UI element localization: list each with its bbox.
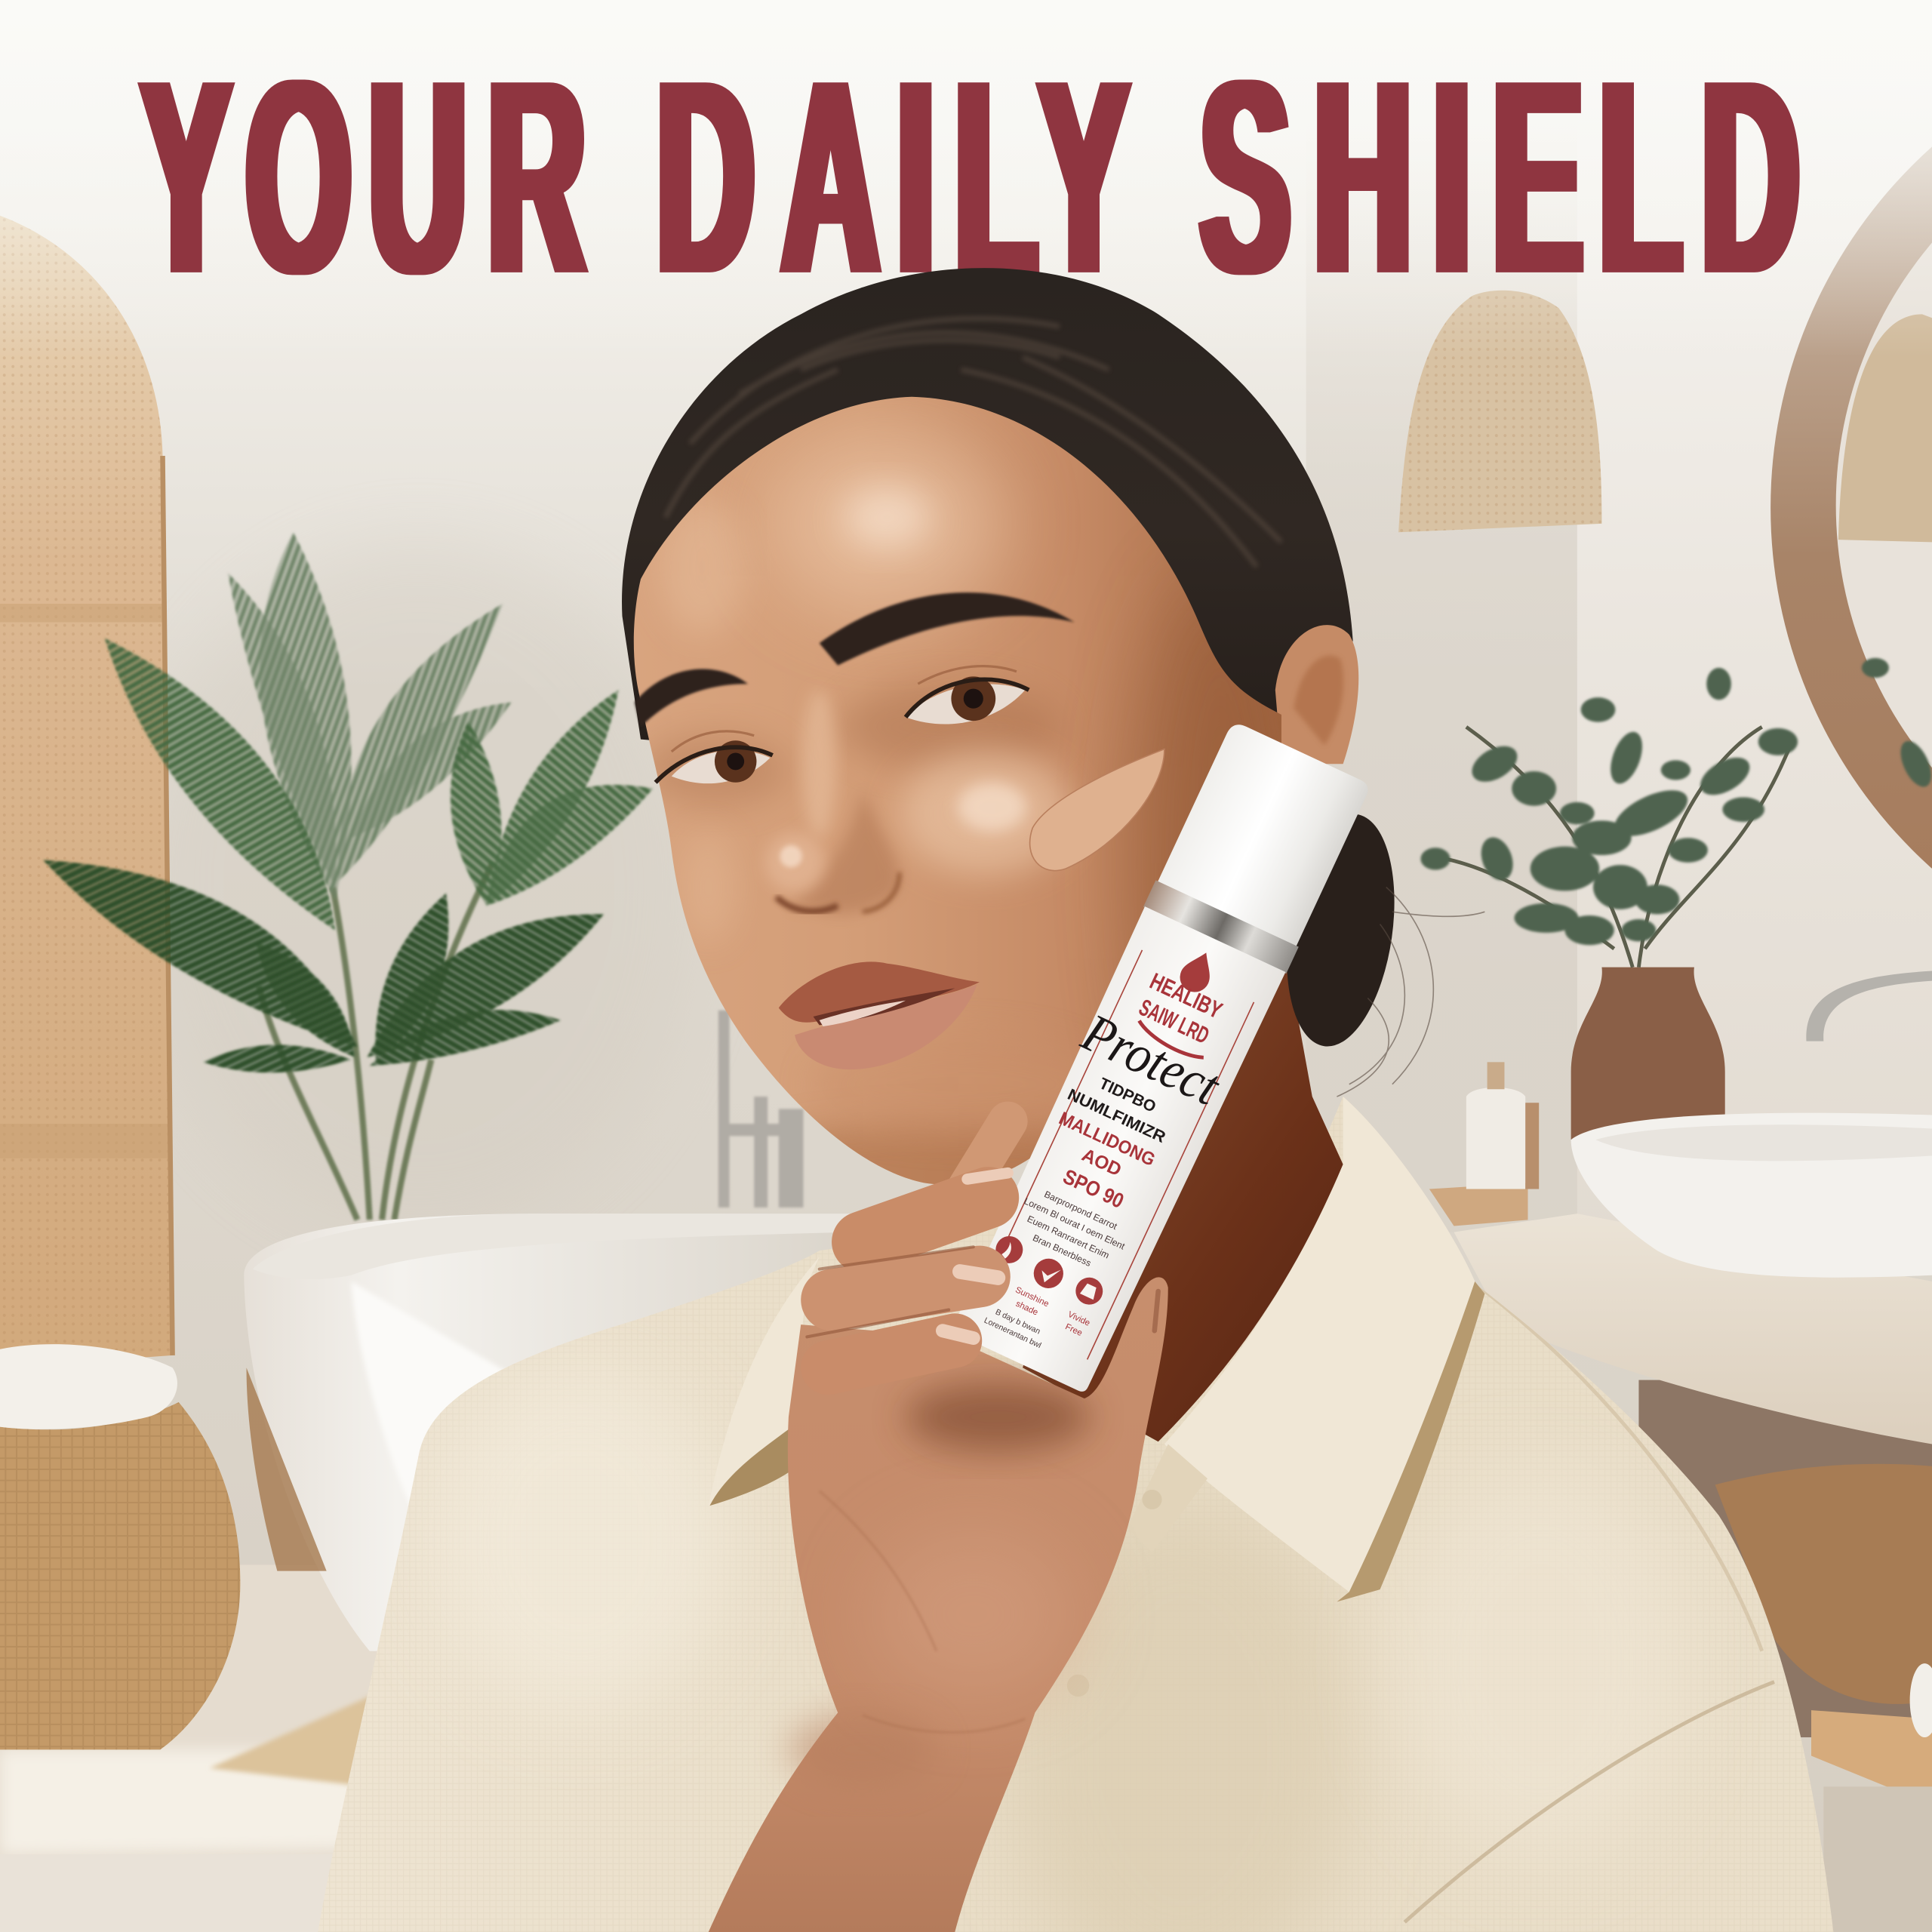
product description <box>1032 1065 1178 1217</box>
palm shadow <box>906 1383 1091 1451</box>
fine print below icons: Sunshine <box>1014 1285 1051 1309</box>
brand name: HEALIBY <box>1146 968 1226 1024</box>
shirt <box>318 1097 1833 1932</box>
fine print below icons: Vivide <box>1066 1310 1091 1328</box>
freestanding bathtub <box>244 1214 863 1651</box>
product description: TIDPBO <box>1097 1075 1158 1116</box>
eye left <box>656 731 773 783</box>
nails <box>968 1173 1008 1179</box>
label border lines <box>976 950 1254 1359</box>
top white haze <box>0 0 1932 357</box>
palm creases <box>820 1491 1025 1733</box>
round mirror <box>1770 23 1932 992</box>
skin shading <box>1114 587 1281 964</box>
sink and tap <box>1571 971 1932 1278</box>
floor <box>0 1564 518 1932</box>
fine print below icons: Free <box>1064 1322 1084 1338</box>
woman <box>318 268 1833 1932</box>
product description: MALLIDONG <box>1056 1109 1158 1171</box>
index finger tip <box>951 1121 1008 1214</box>
bottle cap <box>1158 721 1371 947</box>
product bottle <box>946 719 1374 1396</box>
fronds near <box>43 860 604 1072</box>
leaves <box>1420 658 1932 945</box>
brand drop logo <box>1175 946 1220 997</box>
eucalyptus plant <box>1420 658 1932 1140</box>
mirror lamp reflection <box>1838 314 1932 542</box>
swoosh <box>1134 1020 1206 1062</box>
title: YOUR DAILY SHIELD <box>141 23 1799 332</box>
benefit icons <box>989 1232 1109 1312</box>
fine print: Euem Ranrarert Enim <box>1026 1214 1111 1261</box>
rattan room divider <box>0 216 173 1367</box>
brand name: SAIW LRD <box>1135 994 1214 1049</box>
lips <box>779 961 980 1069</box>
forearm and palm <box>709 1277 1168 1932</box>
face <box>632 397 1281 1184</box>
nose <box>765 789 900 913</box>
product bottle: Lorenerantan bwl <box>983 1316 1042 1350</box>
fine print below icons <box>1008 1285 1091 1340</box>
vase <box>1571 968 1725 1140</box>
pendant lamp <box>1398 291 1601 532</box>
cream swatch on cheek <box>1030 749 1164 871</box>
collar seam shadow <box>1337 1281 1484 1601</box>
product bottle: B day b bwan <box>994 1308 1041 1337</box>
shirt collar right <box>1164 1097 1475 1592</box>
fronds mid <box>105 638 653 931</box>
brand name <box>1134 968 1226 1050</box>
fine print: Barprorpond Earrot <box>1043 1189 1119 1232</box>
wicker storage basket <box>1715 1464 1932 1704</box>
product description: SPO 90 <box>1060 1164 1128 1213</box>
eyebrow left <box>635 669 748 727</box>
soap dispenser and tray <box>1429 1062 1539 1226</box>
plant stems <box>259 863 493 1220</box>
fine print <box>1010 1183 1133 1278</box>
hair shine <box>666 318 1281 567</box>
stray hairs <box>1337 888 1484 1097</box>
fine print: Bran Bnerbless <box>1031 1232 1093 1269</box>
fine print: Lorem Bl ourat I oem Elent <box>1023 1195 1127 1252</box>
fine print below icons: shade <box>1014 1300 1039 1318</box>
basket and towel <box>0 1344 327 1749</box>
neck <box>1023 961 1343 1441</box>
ear <box>1275 625 1358 764</box>
metal band <box>1143 880 1299 974</box>
bottle body <box>948 906 1285 1395</box>
placket and buttons <box>1067 1444 1208 1697</box>
branches <box>1429 727 1793 968</box>
skin highlights <box>770 431 1004 616</box>
eye right <box>906 666 1029 724</box>
fronds far <box>228 532 512 900</box>
eyebrow right <box>820 592 1075 666</box>
product description: AOD <box>1078 1145 1124 1180</box>
product description: NUMLFIMIZR <box>1065 1086 1168 1146</box>
shirt collar left <box>709 1257 820 1506</box>
Protect script: Protect <box>1073 1001 1230 1118</box>
fingers <box>807 1121 1158 1367</box>
palm plant <box>43 532 653 1220</box>
hair <box>622 268 1484 1097</box>
counter and lower shelving <box>1454 1214 1932 1932</box>
faucet behind tub <box>718 1011 803 1208</box>
